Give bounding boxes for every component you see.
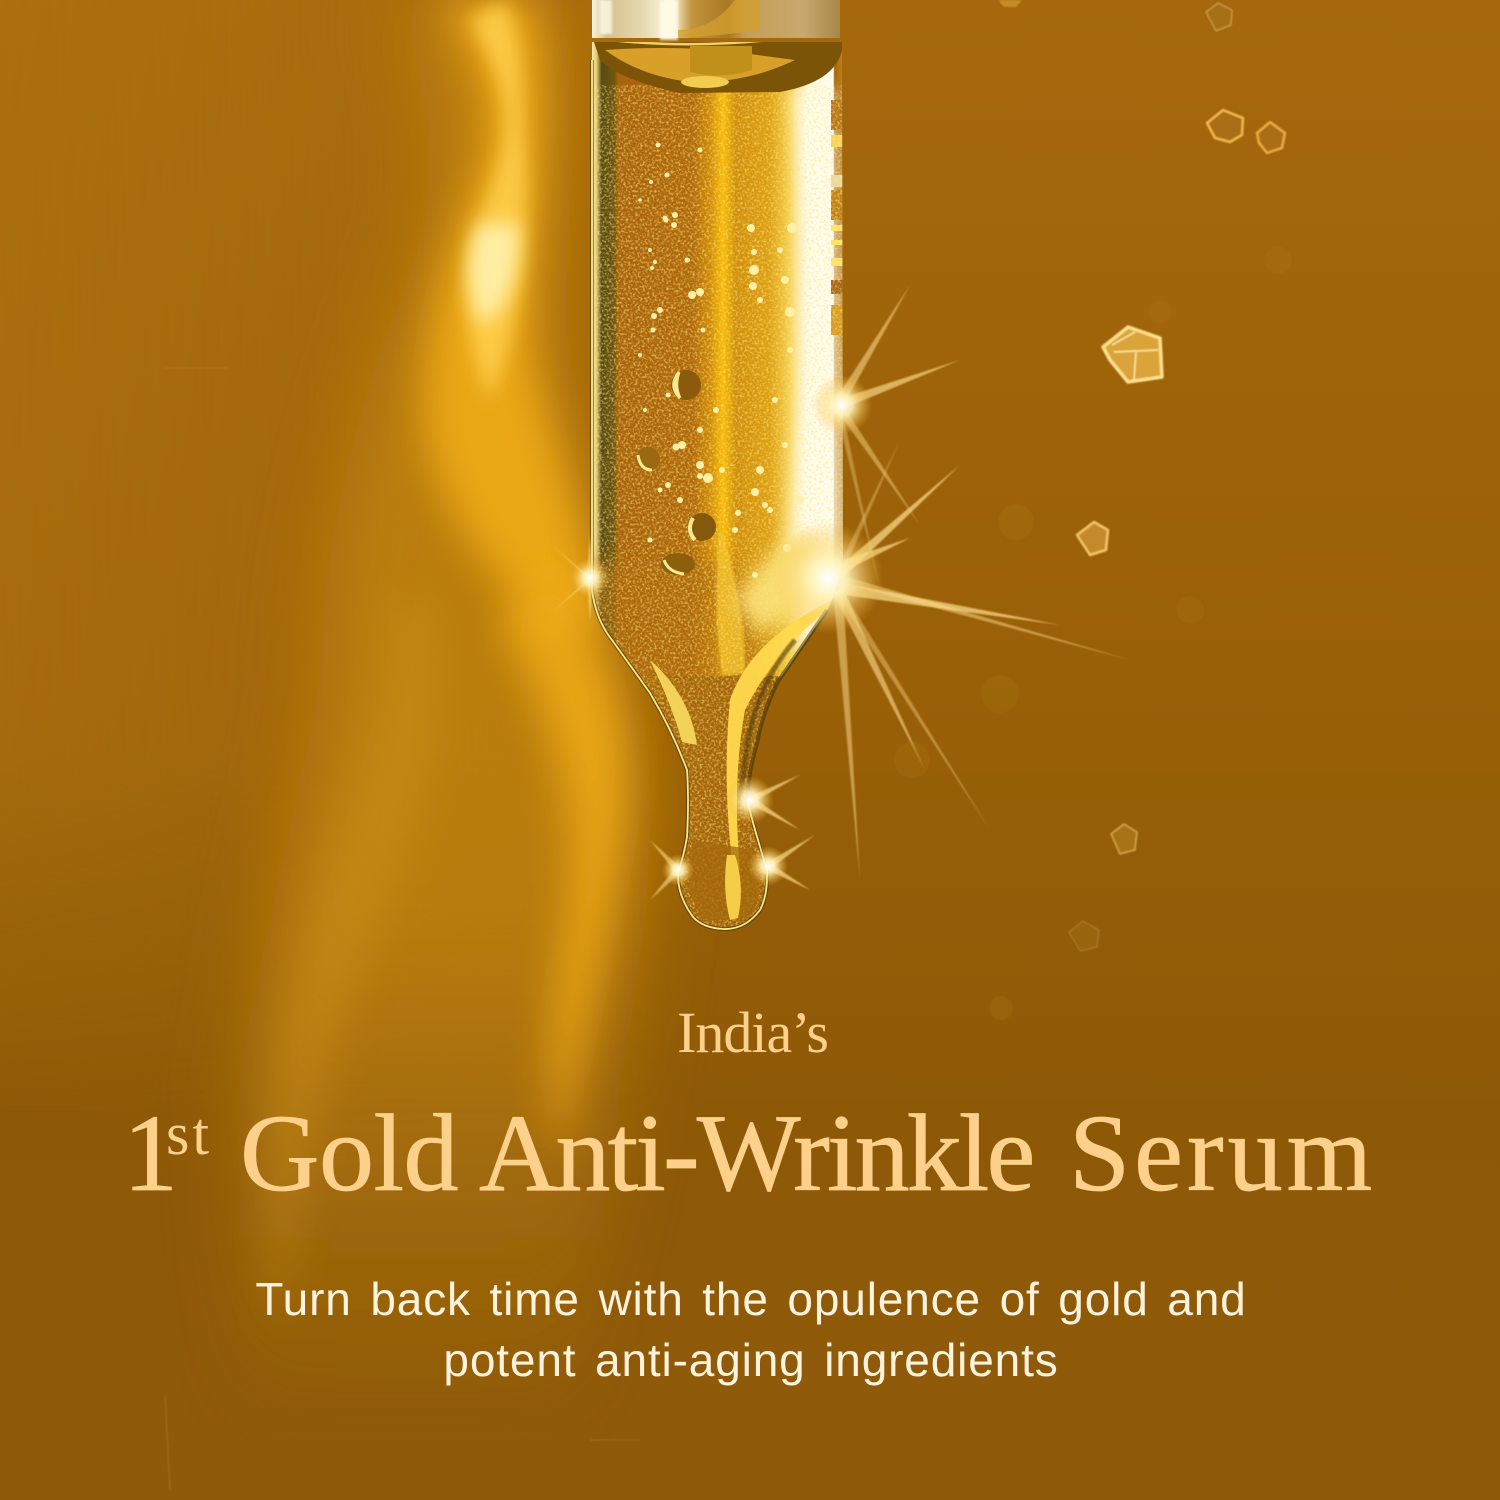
flowing light band	[165, 0, 650, 1500]
subheading text: potent anti-aging ingredients	[443, 1334, 1059, 1386]
background	[0, 0, 1500, 936]
banded reflections	[831, 100, 843, 335]
right streak	[500, 560, 628, 1160]
left streak	[266, 600, 436, 1340]
wider white glow on right edge	[785, 90, 845, 620]
drop interior	[688, 840, 759, 920]
glitter texture	[590, 85, 846, 945]
subheading text: Turn back time with the opulence of gold and	[255, 1273, 1247, 1325]
bubbles and glitter dots	[636, 142, 804, 578]
glass tube with serum	[590, 30, 846, 945]
heading: 1st Gold Anti-Wrinkle Serum: Serum	[1069, 1092, 1376, 1214]
tube edge highlights	[592, 60, 827, 929]
icon: dropper	[590, 0, 846, 945]
heading: 1st Gold Anti-Wrinkle Serum: Gold	[240, 1092, 458, 1214]
eyebrow text: India's: India’s	[677, 1000, 828, 1065]
heading: 1st Gold Anti-Wrinkle Serum: 1	[123, 1092, 178, 1214]
subheading text	[255, 1273, 1247, 1386]
heading: 1st Gold Anti-Wrinkle Serum: st	[166, 1101, 212, 1167]
heading: 1st Gold Anti-Wrinkle Serum: Anti-Wrinkle	[479, 1092, 1032, 1214]
lower body tones	[590, 560, 770, 940]
left shoulder flake	[650, 660, 697, 745]
sparkles	[552, 285, 1130, 900]
gold flakes	[998, 0, 1285, 951]
right curved streak	[727, 600, 832, 870]
glass cap collar	[592, 0, 840, 40]
heading: 1st Gold Anti-Wrinkle Serum	[123, 1092, 1376, 1214]
upper bright wave	[424, 0, 600, 640]
bokeh	[894, 246, 1292, 1020]
liquid meniscus	[594, 42, 842, 93]
